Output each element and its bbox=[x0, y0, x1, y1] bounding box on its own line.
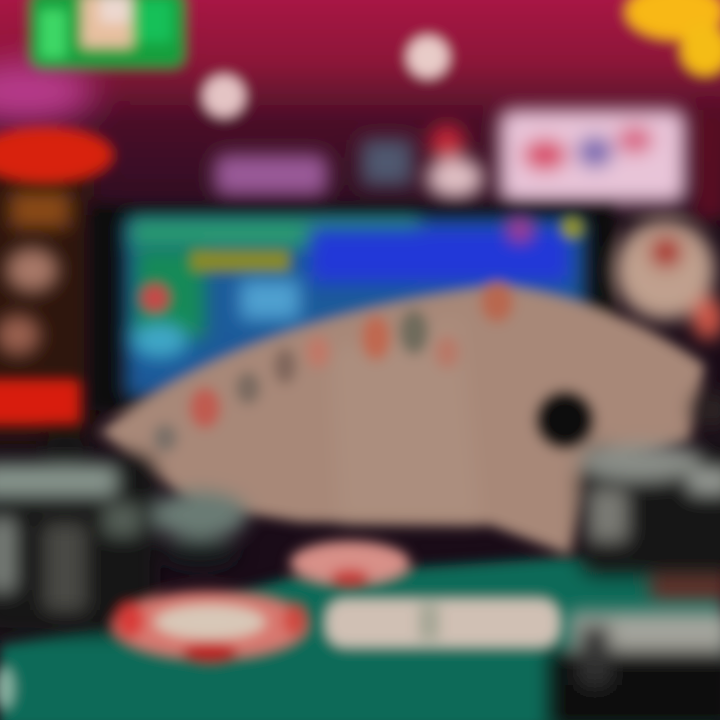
wall signs bbox=[215, 110, 685, 202]
white and red chips on table bbox=[112, 541, 560, 662]
playing cards fan bbox=[100, 282, 705, 555]
table edge highlight bbox=[0, 666, 15, 710]
ceiling lights bbox=[202, 35, 450, 118]
slot machine left bbox=[0, 127, 113, 440]
card spade pip bbox=[537, 392, 593, 448]
green felt table bbox=[0, 558, 720, 720]
chips top right bbox=[615, 220, 720, 430]
chip stack left bbox=[0, 431, 248, 633]
sign: green and white top left bbox=[30, 0, 185, 68]
chip stack right bbox=[550, 444, 720, 720]
sign: yellow top right bbox=[625, 0, 720, 76]
background wall bbox=[0, 0, 720, 220]
screen bbox=[92, 205, 614, 410]
